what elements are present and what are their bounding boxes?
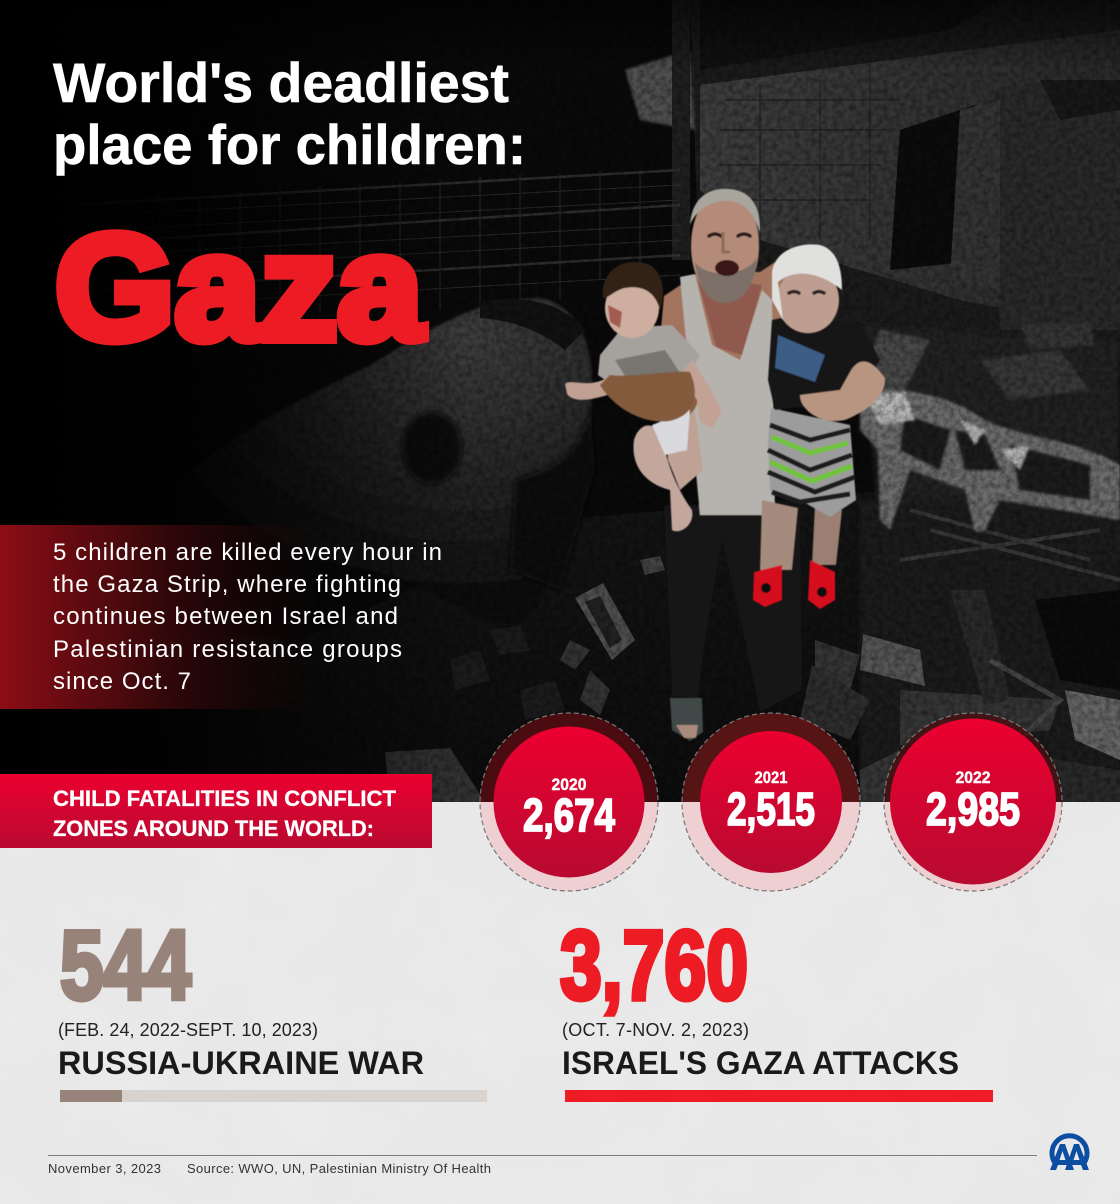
circle: 2020: 2020 bbox=[552, 775, 586, 794]
intro text panel bbox=[0, 525, 442, 709]
intro text panel: continues between Israel and bbox=[53, 603, 398, 630]
man shoulders bbox=[660, 262, 786, 360]
child head bbox=[777, 267, 839, 333]
progress bar: Russia-Ukraine bbox=[60, 1090, 487, 1102]
circle: 2020: 2,674 bbox=[523, 789, 615, 841]
man chest skin bbox=[697, 278, 762, 355]
heading banner: child fatalities: CHILD FATALITIES IN CONFLICT bbox=[53, 786, 397, 811]
statistic: Russia-Ukraine war: (FEB. 24, 2022-SEPT. 10, 2023) bbox=[58, 1020, 318, 1040]
baby on left arm bbox=[565, 262, 722, 531]
child shirt bbox=[768, 315, 880, 410]
statistic: Israel's Gaza attacks: ISRAEL'S GAZA ATTACKS bbox=[562, 1045, 959, 1081]
ground rubble bbox=[385, 324, 1120, 802]
intro text panel: 5 children are killed every hour in bbox=[53, 539, 442, 566]
baby diaper bbox=[652, 410, 690, 455]
title: place for children: bbox=[53, 113, 526, 176]
title bbox=[53, 51, 526, 176]
circle: 2022 bbox=[884, 713, 1062, 891]
circle: 2021: 2021 bbox=[754, 768, 788, 787]
man trousers bbox=[664, 505, 802, 712]
progress bar: Israel bbox=[565, 1090, 993, 1102]
baby legs bbox=[633, 425, 692, 531]
shoes bbox=[753, 565, 782, 607]
circle: 2020 bbox=[480, 713, 658, 891]
circle: 2022: 2,985 bbox=[926, 783, 1020, 835]
man arm bbox=[688, 396, 698, 414]
man tank top bbox=[680, 274, 775, 515]
statistic: Russia-Ukraine war: RUSSIA-UKRAINE WAR bbox=[58, 1045, 424, 1081]
right cow bbox=[860, 390, 1120, 532]
child arm and hand bbox=[800, 362, 885, 421]
baby shirt bbox=[597, 324, 700, 380]
left cow bbox=[264, 297, 593, 626]
title: World's deadliest bbox=[53, 51, 509, 114]
texture overlay bbox=[302, 29, 1120, 802]
statistic: Russia-Ukraine war bbox=[58, 910, 487, 1102]
headline: Gaza: Gaza bbox=[55, 203, 425, 371]
intro text panel: since Oct. 7 bbox=[53, 668, 191, 695]
footer: November 3, 2023 bbox=[48, 1161, 161, 1176]
footer bbox=[48, 1155, 1037, 1176]
man head bbox=[690, 200, 760, 284]
statistic: Russia-Ukraine war: 544 bbox=[60, 910, 191, 1020]
child in bandage on right arm bbox=[753, 244, 885, 609]
fence bbox=[192, 169, 680, 316]
statistic: Israel's Gaza attacks: 3,760 bbox=[560, 910, 748, 1020]
baby arms bbox=[564, 378, 608, 400]
child legs bbox=[760, 500, 798, 570]
intro text panel: the Gaza Strip, where fighting bbox=[53, 571, 401, 598]
man bbox=[660, 188, 802, 742]
intro text panel: Palestinian resistance groups bbox=[53, 636, 402, 663]
circle: 2022: 2022 bbox=[956, 768, 990, 787]
footer: Source: WWO, UN, Palestinian Ministry Of Health bbox=[187, 1161, 491, 1176]
statistic: Israel's Gaza attacks bbox=[560, 910, 993, 1102]
child shorts bbox=[768, 408, 856, 517]
left overlays darkening the photo bbox=[0, 0, 1120, 802]
photo: man carrying two children through rubble bbox=[0, 0, 1120, 802]
heading banner: child fatalities bbox=[0, 774, 432, 848]
wall and ruined building bbox=[625, 0, 1120, 360]
circle: 2021 bbox=[682, 713, 860, 891]
heading banner: child fatalities: ZONES AROUND THE WORLD: bbox=[53, 816, 374, 841]
icon: Anadolu Agency logo bbox=[1050, 1136, 1089, 1170]
man sandal bbox=[670, 698, 703, 741]
statistic: Israel's Gaza attacks: (OCT. 7-NOV. 2, 2023) bbox=[562, 1020, 749, 1040]
baby head bbox=[605, 278, 659, 338]
circle: 2021: 2,515 bbox=[727, 783, 815, 835]
